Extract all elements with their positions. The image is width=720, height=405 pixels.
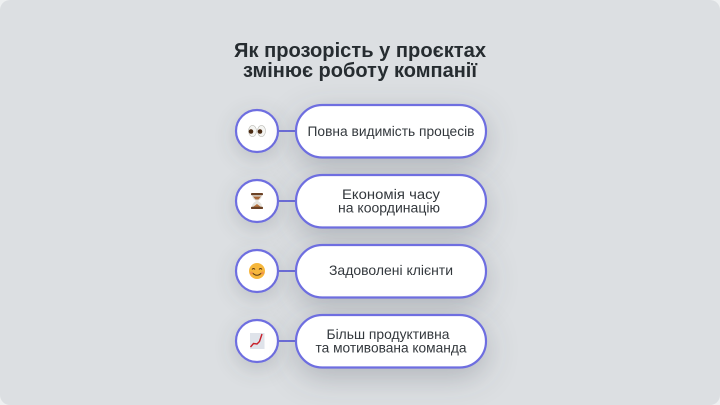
pill: productive team: [296, 315, 486, 368]
pill: productive team: Більш продуктивна: [326, 326, 450, 342]
item: productive team: [236, 315, 486, 368]
item: full process visibility: [236, 105, 486, 158]
icon: smiling face: [236, 250, 278, 292]
pill: time savings: на координацію: [338, 200, 440, 216]
item: time savings: [236, 175, 486, 228]
pill: satisfied clients: [296, 245, 486, 298]
pill: satisfied clients: Задоволені клієнти: [329, 262, 453, 278]
item: satisfied clients: [236, 245, 486, 298]
pill: full process visibility: [296, 105, 486, 158]
pill: full process visibility: Повна видимість процесів: [308, 123, 474, 139]
pill: productive team: та мотивована команда: [316, 340, 467, 356]
icon: rising chart: [236, 320, 278, 362]
pill: time savings: Економія часу: [342, 186, 440, 202]
title: Як прозорість у проєктах: [234, 39, 487, 62]
title: змінює роботу компанії: [243, 59, 478, 82]
icon: eyes: [236, 110, 278, 152]
pill: time savings: [296, 175, 486, 228]
icon: hourglass: [236, 180, 278, 222]
title: [234, 39, 487, 82]
